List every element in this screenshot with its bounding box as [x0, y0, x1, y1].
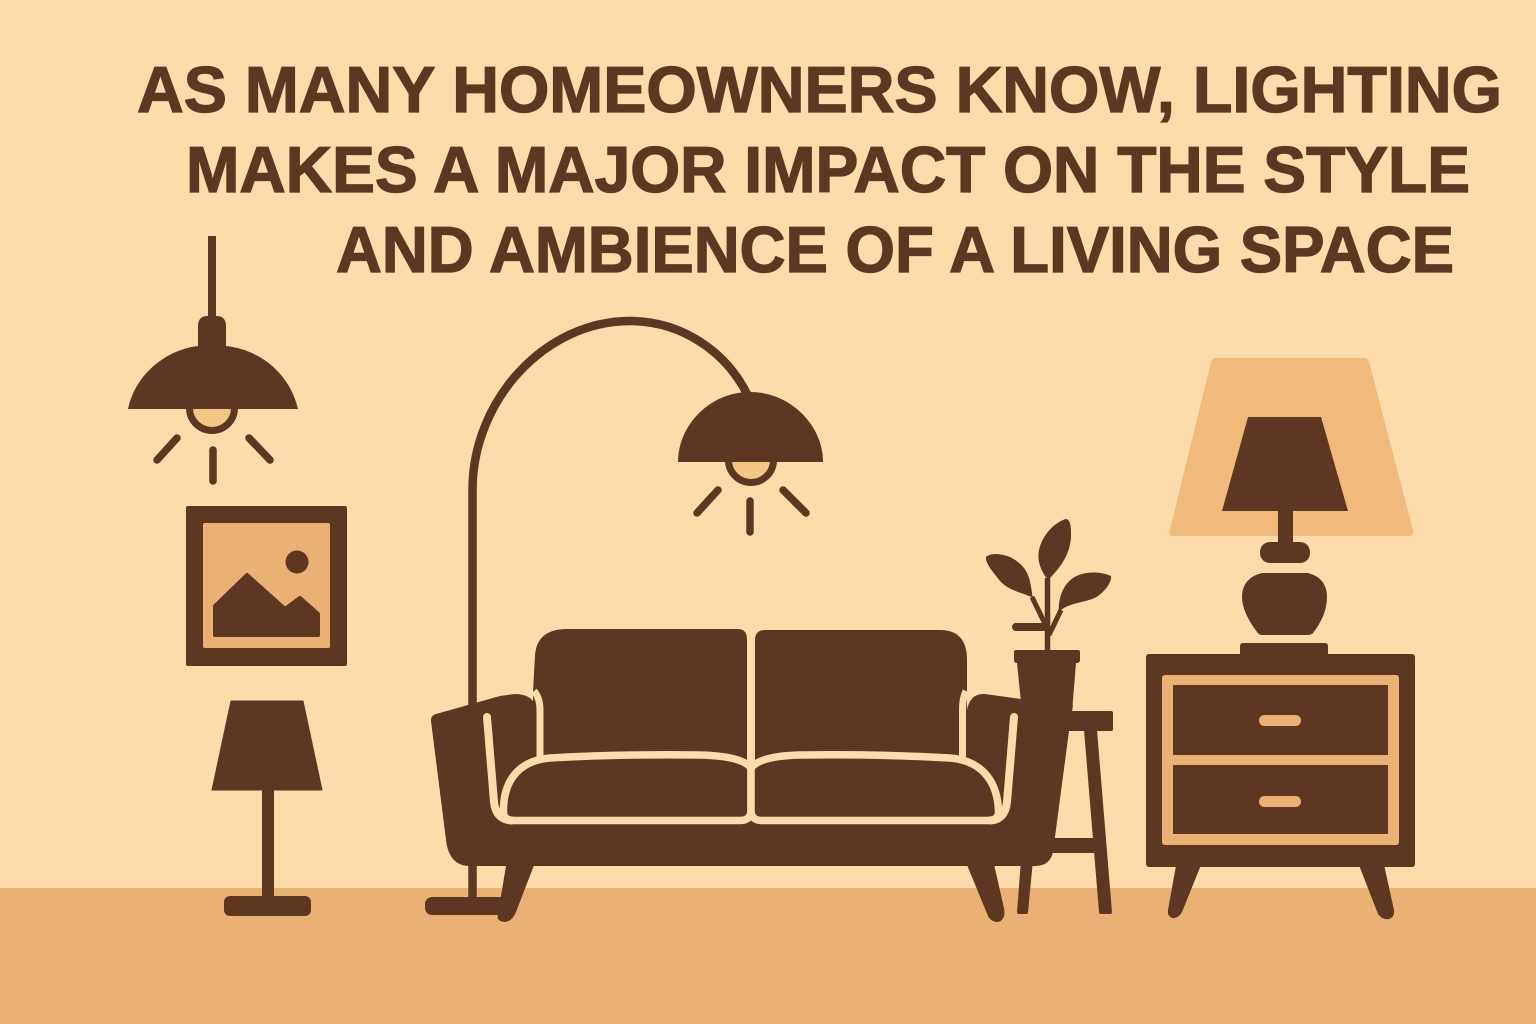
icon: potted plant [986, 519, 1111, 712]
icon: pendant lamp [128, 236, 298, 481]
title: AS MANY HOMEOWNERS KNOW, LIGHTING [137, 53, 1502, 126]
icon: small table lamp [212, 701, 322, 916]
floor [0, 888, 1536, 1024]
title [137, 53, 1502, 286]
title: MAKES A MAJOR IMPACT ON THE STYLE [186, 133, 1470, 206]
icon: arc floor lamp [425, 321, 823, 915]
icon: nightstand [1146, 654, 1415, 919]
icon: table lamp with glow [1170, 358, 1413, 656]
icon: framed picture [186, 506, 347, 666]
icon: sofa [431, 629, 1073, 922]
icon: side table [1017, 711, 1113, 914]
title: AND AMBIENCE OF A LIVING SPACE [336, 213, 1454, 286]
